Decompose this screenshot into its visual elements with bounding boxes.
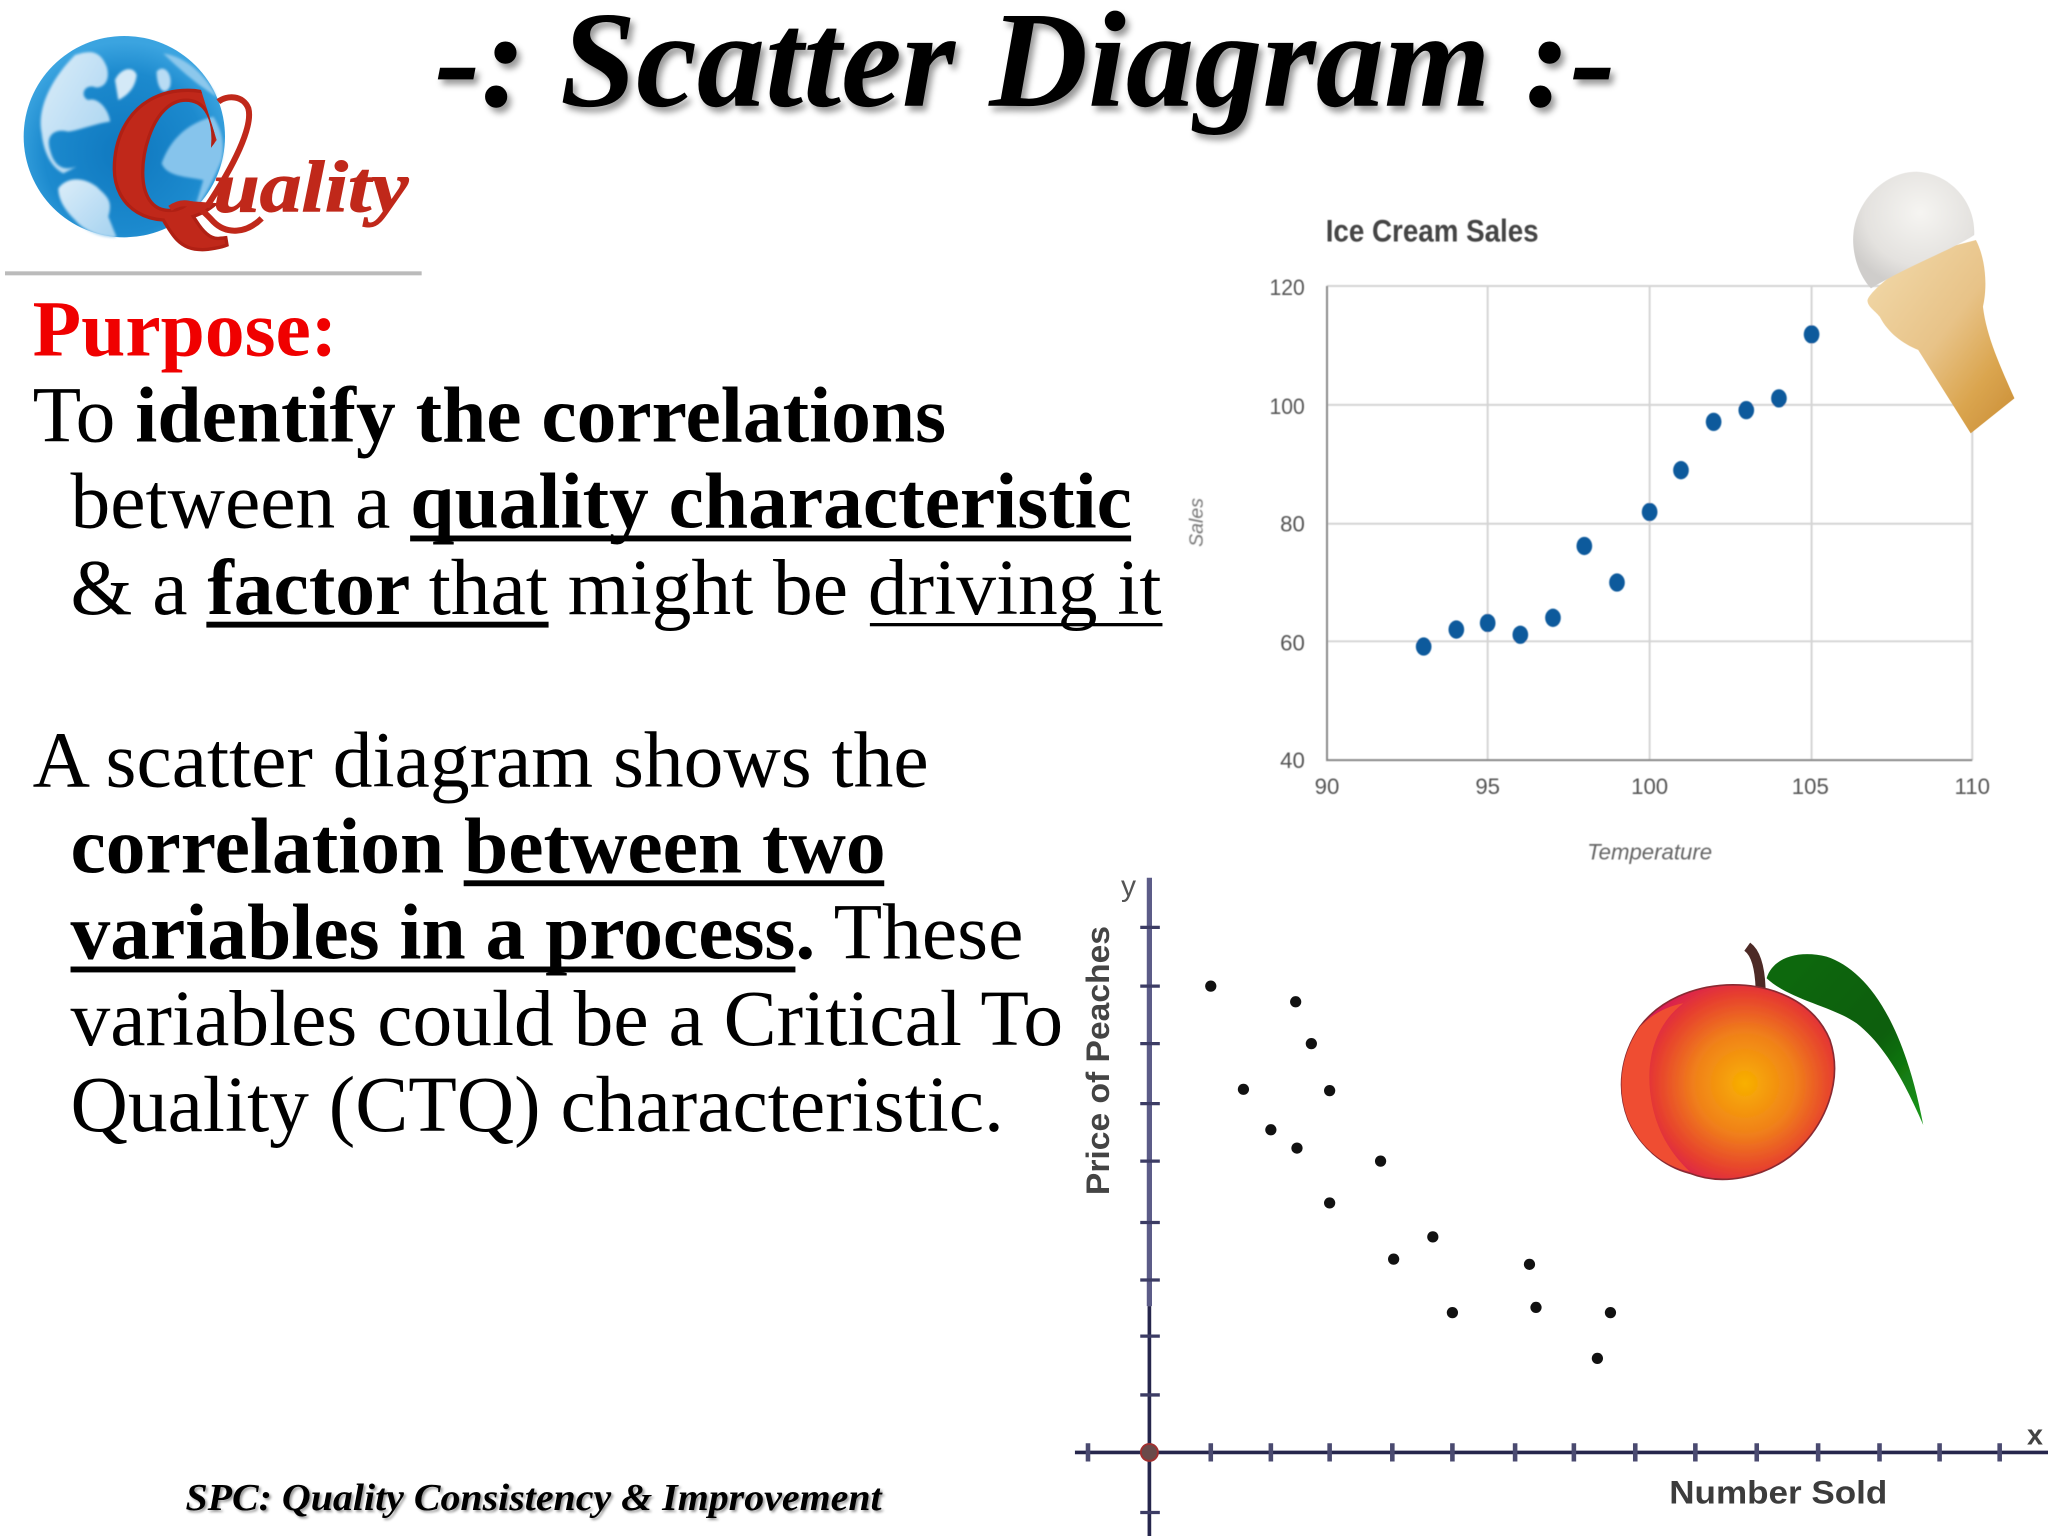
y axis label: Sales bbox=[1186, 498, 1208, 547]
x axis label: Temperature bbox=[1587, 839, 1712, 864]
x axis title: Number Sold bbox=[1669, 1473, 1887, 1510]
y label: y bbox=[1121, 870, 1136, 903]
axes bbox=[1075, 878, 2048, 1536]
text block: scatter definition: variables could be a Critical To bbox=[71, 975, 1063, 1063]
Q swash bbox=[170, 97, 262, 231]
y tick labels: 100 bbox=[1270, 394, 1305, 419]
text block: scatter definition: Quality (CTQ) characteristic. bbox=[71, 1061, 1004, 1149]
x tick labels bbox=[1315, 774, 1990, 799]
x tick labels: 100 bbox=[1631, 774, 1668, 799]
data points bbox=[1416, 325, 1819, 656]
y tick labels: 40 bbox=[1280, 748, 1305, 773]
x tick labels: 105 bbox=[1792, 774, 1829, 799]
text block: purpose statement: To identify the correlations bbox=[33, 371, 946, 459]
panel: purpose text bbox=[33, 285, 1162, 1149]
text block: scatter definition bbox=[33, 716, 1063, 1149]
x tick labels: 110 bbox=[1955, 774, 1990, 799]
x tick labels: 90 bbox=[1315, 774, 1339, 799]
icon: peach bbox=[1622, 947, 1923, 1179]
text block: purpose statement: between a quality characteristic bbox=[71, 458, 1132, 546]
text block: purpose statement bbox=[33, 371, 1162, 632]
x label: x bbox=[2027, 1420, 2043, 1452]
y tick labels bbox=[1270, 275, 1305, 773]
chart: ice cream sales bbox=[1186, 214, 1990, 864]
scoop bbox=[1853, 172, 1974, 288]
grid bbox=[1327, 286, 1972, 760]
globe bbox=[24, 36, 225, 237]
y axis title: Price of Peaches bbox=[1079, 926, 1116, 1195]
text block: scatter definition: variables in a process. These bbox=[71, 889, 1023, 977]
text block: purpose statement: & a factor that might be driving it bbox=[71, 544, 1162, 632]
text block: scatter definition: A scatter diagram shows the bbox=[33, 716, 929, 804]
y tick labels: 80 bbox=[1280, 512, 1305, 537]
icon: ice cream cone bbox=[1853, 172, 2014, 433]
stem bbox=[1747, 947, 1761, 988]
letter Q: Q bbox=[107, 46, 247, 260]
axes bbox=[1327, 286, 1972, 760]
chart: price of peaches bbox=[1075, 870, 2048, 1536]
footer: SPC: Quality Consistency & Improvement bbox=[185, 1477, 883, 1519]
y tick labels: 120 bbox=[1270, 275, 1305, 300]
x tick labels: 95 bbox=[1475, 774, 1500, 799]
leaf bbox=[1767, 954, 1923, 1125]
text block: scatter definition: correlation between two bbox=[71, 802, 886, 890]
y tick labels: 60 bbox=[1280, 630, 1305, 655]
fruit bbox=[1622, 985, 1834, 1179]
cone bbox=[1867, 240, 2014, 433]
chart title: Ice Cream Sales bbox=[1326, 214, 1539, 249]
divider bbox=[5, 271, 422, 275]
icon: quality globe logo bbox=[5, 36, 422, 275]
heading: purpose: Purpose: bbox=[33, 285, 337, 373]
crease bbox=[1622, 1003, 1690, 1172]
origin marker bbox=[1141, 1444, 1158, 1461]
wordmark: uality bbox=[213, 147, 409, 228]
data points bbox=[1205, 981, 1616, 1364]
